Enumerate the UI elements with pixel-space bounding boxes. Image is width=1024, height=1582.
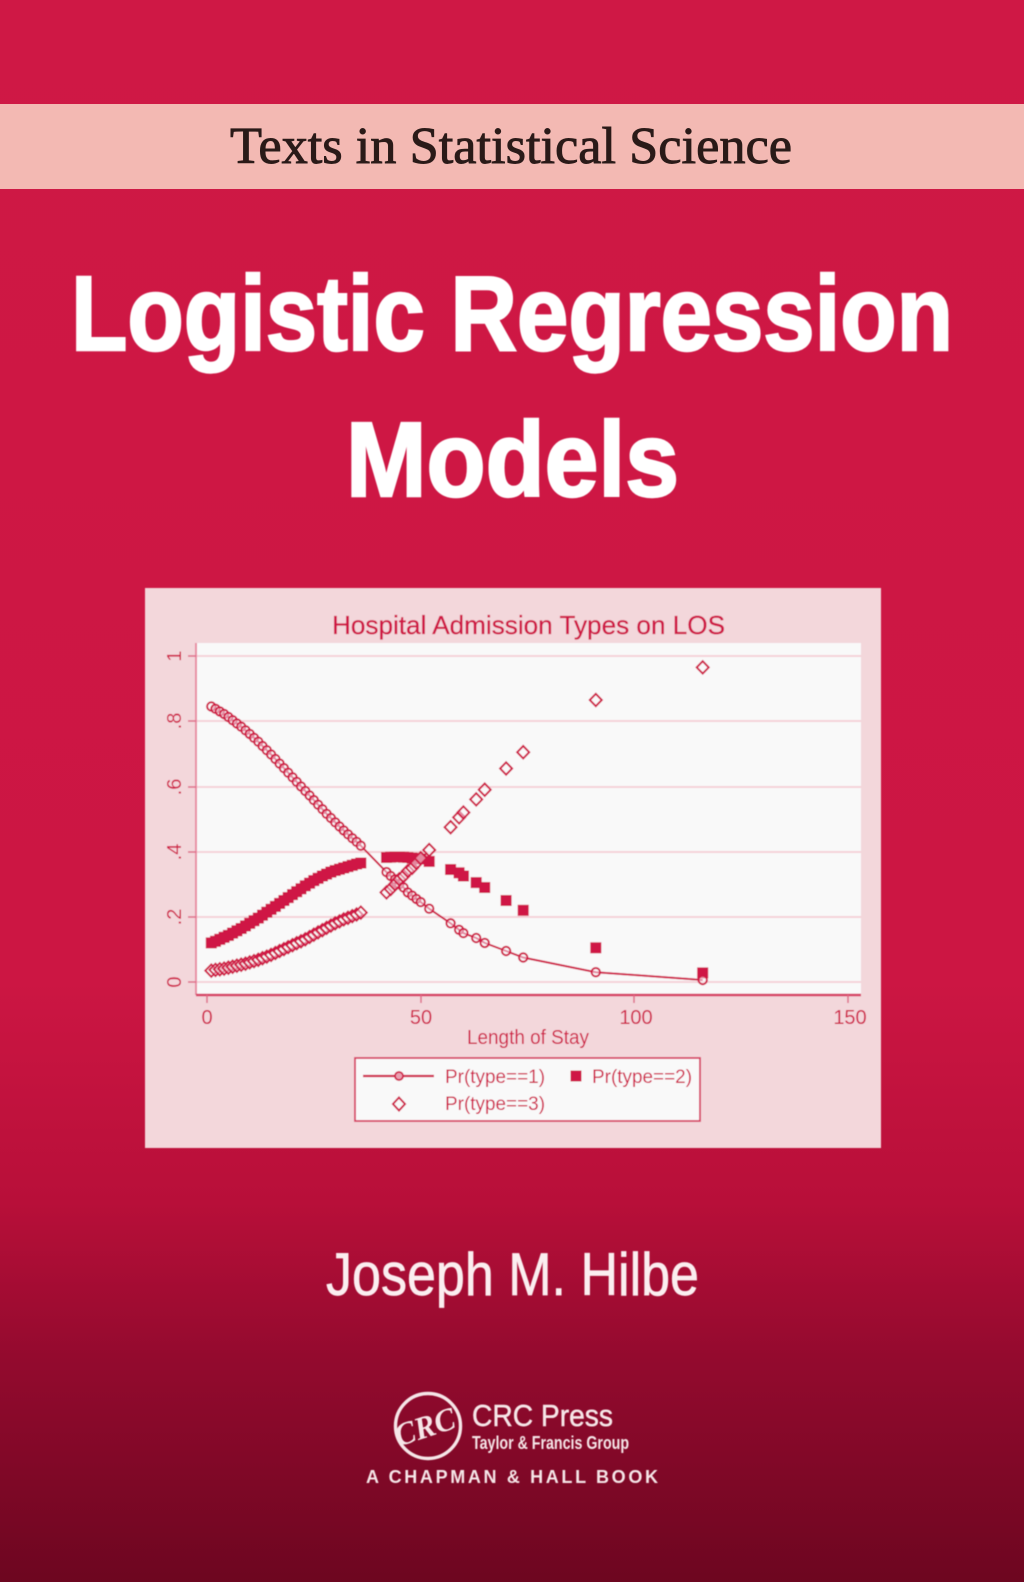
legend labels <box>445 1066 692 1115</box>
chart panel <box>145 588 881 1148</box>
author: Joseph M. Hilbe <box>326 1241 699 1308</box>
x axis labels: 0 <box>201 1007 213 1029</box>
y axis labels: 1 <box>164 650 186 662</box>
legend entry: line with circle <box>363 1072 434 1080</box>
legend labels: Pr(type==1) <box>445 1066 545 1088</box>
imprint line: A CHAPMAN & HALL BOOK <box>366 1467 658 1487</box>
x axis labels: 50 <box>410 1007 432 1029</box>
title: Models <box>346 401 679 519</box>
y axis labels: .4 <box>164 844 186 860</box>
title <box>71 255 953 519</box>
legend entry: square <box>570 1070 582 1082</box>
series: Pr(type==3) diamonds <box>211 667 703 971</box>
x axis title: Length of Stay <box>467 1027 589 1049</box>
y axis labels: .6 <box>164 779 186 795</box>
legend labels: Pr(type==3) <box>445 1093 545 1115</box>
y axis labels: 0 <box>164 976 186 988</box>
chart title: Hospital Admission Types on LOS <box>332 610 725 640</box>
x axis labels: 100 <box>619 1007 653 1029</box>
legend entry: diamond <box>393 1098 405 1110</box>
legend labels: Pr(type==2) <box>592 1066 692 1088</box>
y axis labels: .2 <box>164 909 186 925</box>
series: Pr(type==1) line with circles <box>211 706 703 980</box>
legend <box>355 1058 700 1121</box>
x axis labels <box>201 1007 867 1029</box>
publisher name: CRC Press <box>472 1398 613 1433</box>
icon: CRC circle: CRC <box>390 1400 460 1453</box>
x axis labels: 150 <box>833 1007 867 1029</box>
series banner: Texts in Statistical Science <box>230 118 792 175</box>
series banner <box>0 104 1024 189</box>
publisher group: Taylor & Francis Group <box>472 1433 629 1453</box>
y axis labels <box>164 650 186 988</box>
publisher logo <box>366 1394 658 1487</box>
plot area <box>188 643 861 1003</box>
series: Pr(type==2) squares <box>211 857 703 973</box>
y axis labels: .8 <box>164 713 186 729</box>
